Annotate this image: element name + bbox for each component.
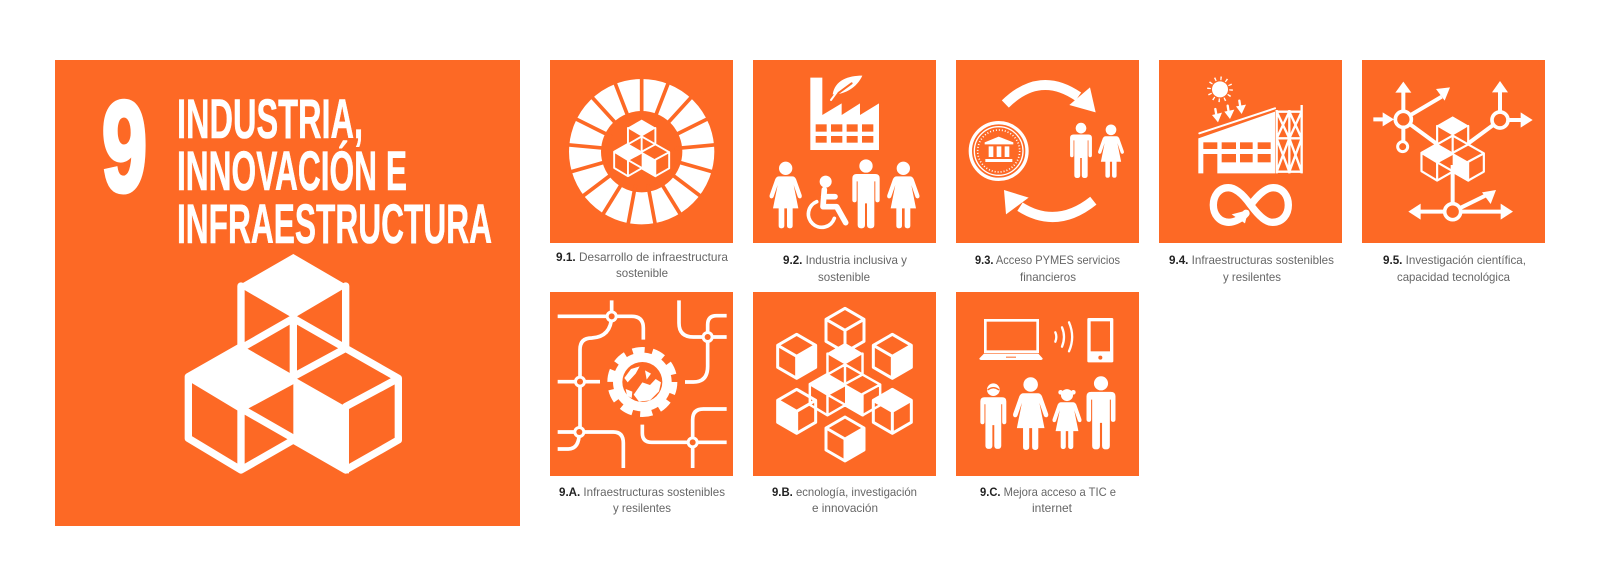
caption 9.5: 9.5. Investigación científica, [1383, 254, 1526, 267]
heading: goal title: INNOVACIÓN E [177, 139, 407, 202]
caption 9.A: y resilentes [613, 502, 671, 515]
icon: stacked cubes [185, 254, 398, 473]
icon: man and woman [1070, 123, 1124, 178]
panel: goal 9 main [55, 60, 520, 526]
heading: goal title: INFRAESTRUCTURA [177, 192, 492, 255]
icon: cubes with branching arrows [1373, 81, 1533, 220]
icon: factory with leaf [810, 76, 879, 150]
caption 9.B: e innovación [812, 502, 878, 515]
icon: segmented wheel with cubes [565, 75, 718, 227]
icon: exchange arrows [1004, 85, 1096, 217]
caption 9.C: internet [1032, 502, 1073, 515]
caption 9.C: 9.C. Mejora acceso a TIC e [980, 486, 1120, 499]
panel: target 9.B [753, 292, 936, 515]
heading: goal title [177, 87, 492, 255]
caption 9.1: 9.1. Desarrollo de infraestructura [556, 251, 725, 264]
icon: solar factory with scaffold [1198, 105, 1302, 173]
caption 9.1: sostenible [616, 267, 668, 280]
panel: target 9.3 [956, 60, 1139, 284]
caption 9.A: 9.A. Infraestructuras sostenibles [559, 486, 725, 499]
icon: family of four [980, 376, 1115, 450]
panel: target 9.4 [1159, 60, 1342, 284]
icon: pipe network [558, 300, 727, 468]
panel: target 9.A [550, 292, 733, 515]
heading: goal title: INDUSTRIA, [177, 87, 363, 150]
icon: cube cluster [778, 308, 911, 461]
caption 9.2: 9.2. Industria inclusiva y [783, 254, 907, 267]
panel: target 9.5 [1362, 60, 1545, 284]
caption 9.5: capacidad tecnológica [1397, 271, 1511, 284]
caption 9.3: 9.3. Acceso PYMES servicios [975, 254, 1126, 267]
icon: laptop, wifi and phone [979, 318, 1113, 362]
panel: target 9.2 [753, 60, 936, 284]
icon: bank coin [970, 123, 1027, 179]
icon: sun and arrows [1209, 78, 1246, 122]
caption 9.2: sostenible [818, 271, 870, 284]
icon: inclusive people group [769, 159, 919, 228]
caption 9.4: 9.4. Infraestructuras sostenibles [1169, 254, 1333, 267]
caption 9.3: financieros [1020, 271, 1076, 284]
panel: target 9.C [956, 292, 1139, 515]
icon: infinity loop arrow [1213, 188, 1288, 223]
panel: target 9.1 [550, 60, 733, 280]
icon: gear with globe [612, 351, 673, 413]
caption 9.B: 9.B. ecnología, investigación [772, 486, 920, 499]
caption 9.4: y resilentes [1223, 271, 1281, 284]
goal number 9: 9 [102, 76, 147, 219]
